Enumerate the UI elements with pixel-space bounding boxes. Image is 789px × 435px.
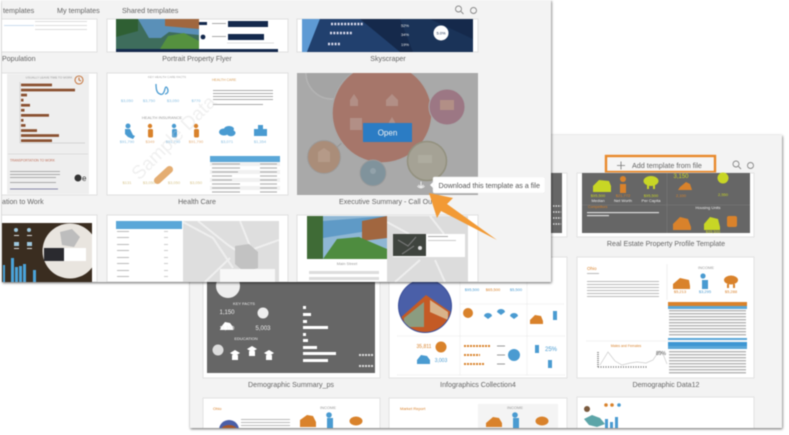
card: demographic data: Ohio: [587, 266, 597, 271]
window shadow: back template gallery: [190, 135, 782, 428]
label: skyscraper: Skyscraper: [370, 55, 406, 63]
card: bottom row middle: Market Report: [400, 406, 426, 411]
card: skyscraper: [297, 19, 478, 52]
card: bottom row left: [202, 398, 380, 429]
card: health care: KEY HEALTH CARE FACTS: [148, 75, 186, 79]
card: map table: [107, 215, 288, 282]
card: office building: [297, 215, 478, 282]
label: executive summary: Executive Summary - Call Ou: [339, 198, 432, 206]
window: back template gallery: [203, 156, 754, 435]
card: commute to work: [0, 73, 97, 195]
icons: search and refresh: [733, 161, 754, 169]
button: add template from file: [606, 156, 715, 172]
watermark: sample data: Sample Data: [128, 92, 221, 184]
card: executive summary hover overlay: [296, 72, 478, 196]
card: real estate property profile: 2,550: [718, 192, 729, 197]
icons: people: [125, 124, 199, 139]
icon: download: [418, 182, 424, 188]
card: office building: Main Street: [337, 261, 358, 266]
card: bottom row right: [576, 396, 754, 429]
card: infographics collection: 25%: [545, 347, 558, 353]
card: health care: $3,050: [121, 98, 134, 103]
photo: office building: [307, 216, 387, 259]
card: health care: $349: [146, 139, 155, 144]
card: skyscraper: 19%: [401, 42, 409, 47]
bar chart: departure time: [21, 84, 75, 142]
card: infographics collection: 35,811: [417, 344, 432, 350]
card: health care: [107, 73, 288, 195]
card: population partial: [0, 19, 97, 52]
tabs: templates: [3, 6, 35, 15]
card: health care: $1,354: [254, 139, 267, 144]
icons: search and refresh: [456, 6, 476, 14]
card: health care: $3,050: [168, 180, 181, 185]
card: demographic summary: 1,150: [219, 310, 235, 316]
button: add template from file: Add template from file: [632, 161, 702, 170]
map with callout: [387, 216, 468, 282]
card: real estate property profile: Median: [591, 198, 605, 203]
card: infographics collection: $65,500: [486, 287, 501, 292]
card: infographics top partial: [550, 172, 568, 238]
text block: health care intro: HEALTH CARE: [212, 78, 237, 82]
window: front template gallery: [0, 0, 551, 282]
table: health care spending: [210, 156, 280, 192]
card: demographic data: $5,213: [674, 289, 687, 294]
card: demographic data: [577, 257, 754, 378]
label: health care: Health Care: [178, 198, 216, 206]
tabs: Shared templates: [122, 6, 179, 15]
card: demographic data: $3,295: [699, 289, 712, 294]
card: infographics collection: 3,003: [435, 358, 447, 364]
card: health care: HEALTH INSURANCE: [142, 115, 182, 120]
card: skyscraper: 34%: [401, 32, 409, 37]
card: real estate property profile: $95,500: [644, 193, 659, 198]
icons: coins and hospital: [219, 125, 267, 136]
card: demographic data: $5,288: [725, 289, 738, 294]
card: health care: $131: [123, 180, 132, 185]
card: demographic data: 89%: [656, 351, 667, 357]
card: bottom row left: Ohio: [213, 406, 222, 411]
label: demographic summary: Demographic Summary_ps: [248, 381, 334, 389]
tooltip: download this template as a file: [430, 177, 545, 193]
icon: bandage: [154, 166, 173, 184]
icon: clock: [75, 76, 83, 84]
card: real estate property profile: $95,500: [591, 193, 606, 198]
text block: health care intro: [212, 78, 273, 105]
card: infographics collection: $95,500: [465, 287, 480, 292]
button: open: Open: [378, 128, 397, 138]
card: real estate property profile: 3,150: [673, 174, 689, 180]
logo: esri: e: [82, 174, 87, 183]
card: commute to work: TRANSPORTATION TO WORK: [10, 158, 56, 162]
label: portrait property flyer: Portrait Property Flyer: [162, 55, 232, 63]
label: commute to work: ation to Work: [2, 198, 44, 206]
card: real estate property profile: Per Capita: [642, 198, 661, 203]
card: demographic data: INCOME: [698, 265, 714, 270]
card: bottom row left: INCOME: [320, 405, 336, 410]
card: demographic summary: EDUCATION: [234, 336, 258, 341]
card: demographic summary: [202, 282, 380, 378]
card: demographic summary: KEY FACTS: [233, 301, 255, 306]
tooltip: download this template as a file: Download this template as a file: [438, 181, 540, 190]
card: skyscraper: 52%: [401, 23, 409, 28]
card: bottom row middle: [388, 398, 568, 429]
card: health care: $3,071: [221, 139, 234, 144]
card: real estate property profile: 2,100: [676, 193, 687, 198]
card: infographics collection: [389, 257, 567, 378]
card: health care: $91,790: [120, 139, 135, 144]
card: real estate property profile: Housing Units: [696, 205, 720, 210]
card: health care: $91,790: [189, 139, 204, 144]
card: health care: $3,050: [167, 98, 180, 103]
card: health care: $3,050: [143, 180, 156, 185]
card: health care: $91,790: [166, 139, 181, 144]
card: health care: $3,050: [190, 180, 203, 185]
card: portrait property flyer: [107, 19, 288, 52]
tabs: [2, 7, 179, 15]
card: commute to work: USUALLY LEAVE TIME TO WORK: [26, 76, 72, 80]
card: real estate property profile: Competitors: [588, 205, 608, 209]
tabs: My templates: [57, 6, 100, 15]
card: real estate property profile: Net Worth: [614, 198, 632, 203]
label: real estate template: Real Estate Property Profile Template: [607, 240, 725, 248]
icon: stethoscope: [156, 84, 168, 94]
label: population: Population: [2, 55, 36, 63]
card: demographic summary: 11,139: [220, 326, 235, 332]
card: dark map infographic: [0, 215, 98, 282]
card: skyscraper: 5.0%: [436, 30, 446, 36]
card: infographics collection: $5,500: [510, 287, 523, 292]
card: real estate property profile: $21,772: [616, 193, 631, 198]
card: bottom row middle: INCOME: [507, 405, 523, 410]
label: demographic data: Demographic Data12: [632, 381, 700, 389]
card: real estate property profile: [577, 172, 754, 237]
card: real estate property profile: $95,500: [706, 229, 721, 234]
arrow: orange pointer to download icon: [429, 193, 497, 240]
card: demographic data: Males and Females: [611, 344, 642, 348]
card: health care: $770: [192, 98, 201, 103]
label: infographics collection: Infographics Collection4: [440, 381, 516, 389]
card: health care: $3,750: [143, 98, 156, 103]
button: open: [363, 123, 412, 142]
card: demographic summary: 5,003: [255, 326, 271, 332]
